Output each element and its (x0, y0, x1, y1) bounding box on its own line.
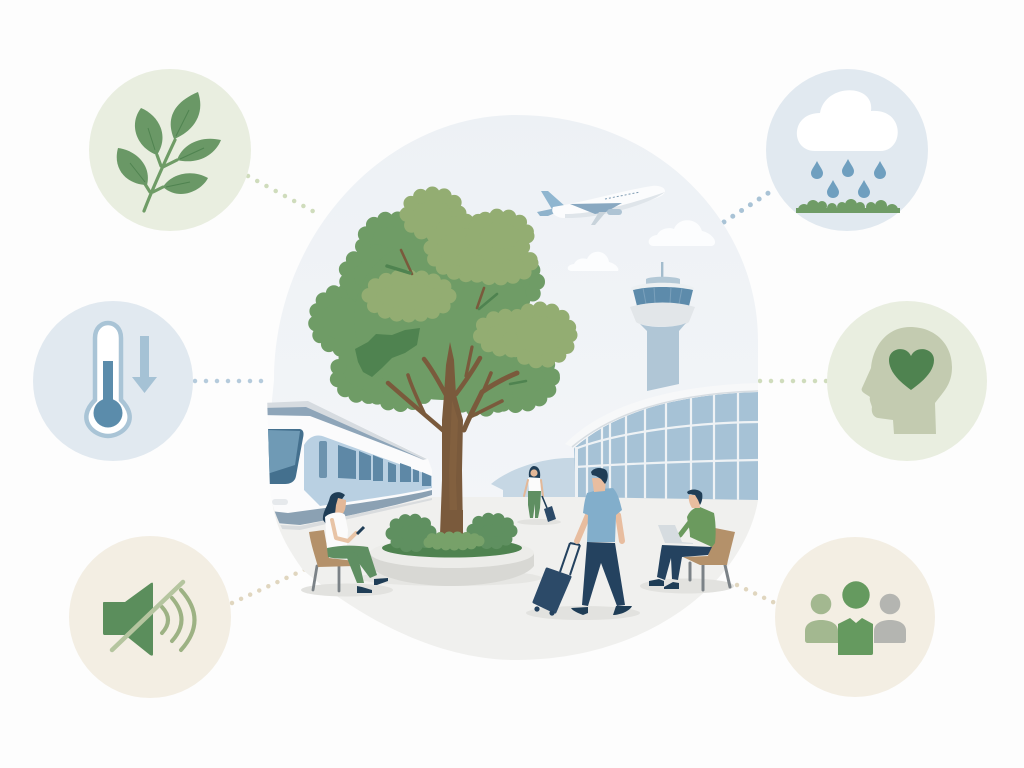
icon panel: leafy branch (89, 69, 251, 231)
central scene panel (260, 110, 765, 667)
cloud: upper (649, 220, 715, 246)
stem (144, 140, 177, 211)
right person (874, 594, 906, 643)
cloud: lower (568, 252, 618, 271)
dotted connector: temperature to scene (195, 379, 272, 383)
train (262, 401, 432, 530)
mute slash (112, 582, 183, 650)
seated woman with phone on bench (301, 492, 393, 596)
leaf midribs (130, 110, 204, 187)
leaves (117, 92, 221, 194)
tree canopy: light foliage (369, 194, 570, 361)
icon panel: thermometer with falling arrow (33, 301, 193, 461)
walking man with rolling suitcase (526, 468, 640, 620)
icon panel: group of people (775, 537, 935, 697)
rain drops (811, 159, 886, 198)
tree trunk and branches (388, 342, 526, 535)
centre person (838, 581, 873, 655)
tree canopy: central fill (354, 236, 530, 400)
heart (889, 349, 934, 390)
dotted connector: leaf to scene (248, 176, 320, 215)
background woman with suitcase (517, 466, 561, 525)
seated man with laptop on bench (640, 489, 735, 594)
icon panel: head with heart (827, 301, 987, 461)
tree canopy: dark patch (355, 328, 420, 377)
down arrow (132, 336, 157, 393)
left person (805, 594, 838, 643)
ground plants (796, 199, 900, 213)
control tower (630, 262, 695, 391)
tree canopy: back foliage (316, 219, 552, 409)
large tree (316, 194, 570, 535)
sky and ground backdrop (260, 110, 765, 667)
dotted connector: community to scene (737, 585, 775, 603)
tree inner branches (387, 250, 497, 309)
icon panel: muted speaker (69, 536, 231, 698)
sound waves (162, 590, 194, 650)
low distant building (491, 458, 576, 497)
planter shrubs (382, 510, 522, 558)
infographic canvas (33, 69, 987, 698)
dotted connector: rain to scene (724, 190, 773, 222)
icon panel: rain cloud over plants (766, 69, 928, 231)
tree planter (358, 510, 542, 586)
dotted connector: wellbeing to scene (760, 379, 827, 383)
dotted connector: noise to scene (232, 568, 308, 603)
terminal building (565, 383, 758, 500)
airplane (537, 186, 665, 225)
